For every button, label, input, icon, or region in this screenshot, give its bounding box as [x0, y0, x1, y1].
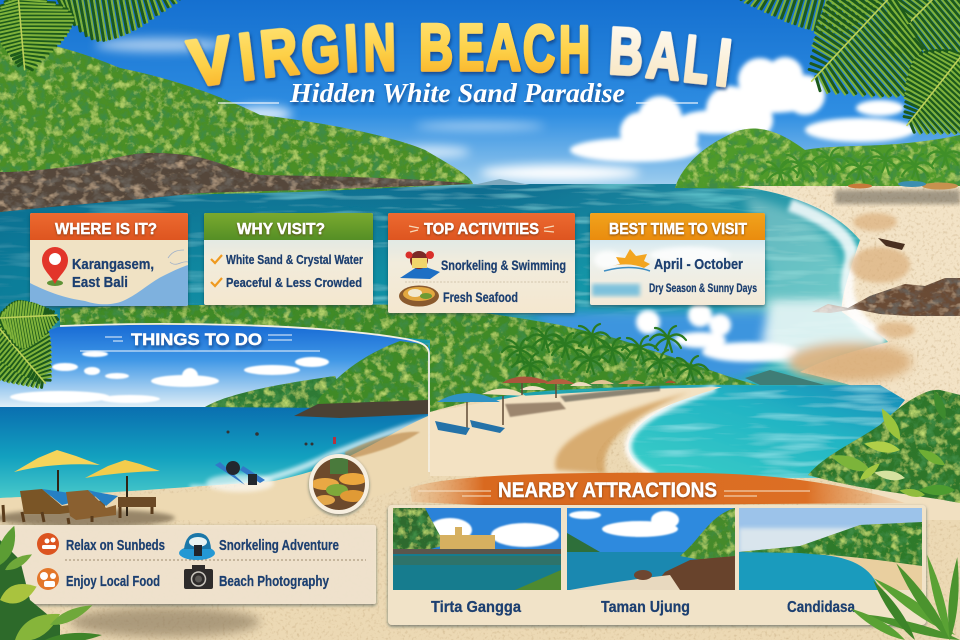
icon: sunbeds — [37, 533, 59, 555]
distant island — [473, 179, 530, 185]
boat — [878, 238, 905, 250]
plant: right bush — [808, 389, 960, 503]
mid foam and wet sand — [760, 300, 912, 382]
label: candidasa: Candidasa — [787, 599, 855, 616]
checks — [211, 255, 222, 286]
palm grove — [502, 324, 708, 382]
wet sand — [555, 392, 690, 474]
text: months: April - October — [654, 256, 743, 273]
icon: snorkeling — [179, 533, 215, 560]
icon: map pin — [42, 247, 68, 286]
panel: top activities — [388, 213, 575, 313]
panel: why visit — [204, 213, 373, 305]
photo: tirta gangga — [393, 508, 561, 590]
text: snorkeling adventure: Snorkeling Adventure — [219, 537, 339, 554]
inset hill — [317, 341, 428, 404]
text: snorkeling: Snorkeling & Swimming — [441, 257, 566, 273]
icon: local food — [37, 568, 59, 590]
title: virgin beach bali: N — [363, 10, 396, 84]
left hill rocks — [0, 153, 473, 212]
reasons: White Sand & Crystal Water — [226, 252, 363, 267]
header — [204, 213, 373, 240]
right hill — [675, 128, 960, 190]
mid clouds — [636, 303, 798, 362]
title: virgin beach bali: C — [523, 11, 555, 85]
title: virgin beach bali: A — [486, 10, 521, 84]
header — [30, 213, 188, 240]
icon: camera — [184, 565, 213, 589]
title: virgin beach bali: I — [343, 11, 360, 85]
icon: snorkeling — [400, 251, 440, 279]
text: enjoy local food: Enjoy Local Food — [66, 573, 160, 590]
inset: things to do scene — [0, 320, 430, 507]
inset sea — [0, 407, 430, 507]
lagoon foam — [628, 388, 715, 476]
foam shoreline — [790, 205, 885, 340]
cloud tint — [594, 247, 730, 269]
photo: taman ujung — [567, 508, 735, 590]
title: virgin beach bali: G — [299, 11, 342, 87]
label: tirta gangga: Tirta Gangga — [431, 599, 521, 616]
distant headland — [745, 370, 825, 385]
title: virgin beach bali: E — [458, 10, 484, 84]
left hill — [0, 41, 473, 212]
lounger one — [20, 489, 105, 514]
heading text: WHY VISIT? — [237, 221, 325, 238]
text: season: Dry Season & Sunny Days — [649, 281, 757, 295]
shadow — [0, 509, 175, 527]
lower sand — [0, 400, 960, 640]
inset foam — [190, 420, 430, 488]
label: taman ujung: Taman Ujung — [601, 599, 690, 616]
right rocks — [812, 278, 960, 316]
subtitle: Hidden White Sand Paradise — [289, 78, 625, 108]
inset rocks — [294, 400, 428, 418]
inset sand shore — [0, 416, 428, 520]
heading: NEARBY ATTRACTIONS — [498, 479, 717, 502]
title: virgin beach bali: H — [559, 12, 590, 86]
header — [388, 213, 575, 240]
central sand — [430, 387, 722, 476]
left umbrellas and loungers — [0, 450, 175, 527]
location text — [72, 256, 154, 291]
title: virgin beach bali — [184, 10, 735, 101]
inset wet sand — [345, 432, 420, 460]
clouds — [95, 38, 915, 181]
panel: attraction cards — [388, 505, 926, 625]
banner — [410, 473, 905, 506]
location text: East Bali — [72, 274, 128, 291]
palm: mid left — [0, 297, 75, 408]
title: virgin beach bali: I — [235, 19, 259, 94]
title: virgin beach bali: V — [184, 21, 237, 101]
umbrella poles — [58, 470, 127, 516]
mid sky patch — [525, 312, 770, 380]
heading: things to do — [80, 330, 320, 351]
panel: things to do list — [0, 525, 376, 604]
reasons: Peaceful & Less Crowded — [226, 275, 362, 290]
central beach umbrellas — [435, 376, 676, 435]
foam wash — [700, 195, 880, 375]
palm: top left — [0, 0, 180, 73]
header — [590, 213, 765, 240]
right hill palms — [762, 143, 960, 186]
lower right sand — [870, 395, 960, 520]
text: beach photography: Beach Photography — [219, 573, 330, 590]
icon: sun — [604, 249, 650, 271]
umbrella two — [85, 460, 160, 478]
far beach umbrellas — [835, 181, 960, 204]
panel: where is it — [30, 213, 188, 306]
swimmers — [226, 430, 336, 446]
inset distant hill — [205, 376, 350, 408]
title: virgin beach bali: L — [681, 21, 713, 97]
heading: things to do: THINGS TO DO — [131, 330, 262, 349]
location text: Karangasem, — [72, 256, 154, 273]
icon: food plate badge — [309, 454, 370, 515]
bottom shade — [70, 607, 260, 637]
map coast — [30, 265, 188, 306]
title: virgin beach bali: A — [644, 17, 684, 94]
palm: top right — [741, 0, 960, 168]
plant: bottom right — [849, 553, 960, 640]
inset clouds — [10, 351, 329, 403]
icon: seafood — [399, 286, 439, 306]
inset sky — [0, 320, 430, 408]
sea — [0, 184, 960, 404]
heading text: WHERE IS IT? — [55, 221, 157, 238]
title: virgin beach bali: R — [257, 13, 301, 91]
central lagoon — [628, 385, 905, 478]
side table — [118, 497, 156, 507]
central jungle — [60, 304, 757, 412]
banner rules — [418, 491, 810, 496]
heading text: BEST TIME TO VISIT — [609, 221, 747, 238]
umbrella one — [14, 450, 100, 472]
heading text: TOP ACTIVITIES — [424, 221, 539, 238]
reasons — [226, 252, 363, 290]
plant: bottom left — [0, 524, 102, 640]
panel: best time to visit — [590, 213, 765, 305]
nearby attractions section — [388, 473, 926, 625]
photo: candidasa — [739, 508, 922, 590]
lounger two — [66, 490, 116, 520]
title: virgin beach bali: B — [607, 13, 645, 89]
jet ski — [206, 461, 274, 492]
wet sand patches — [850, 213, 915, 338]
sky — [0, 0, 960, 190]
text: seafood: Fresh Seafood — [443, 289, 518, 305]
right beach sand — [735, 186, 960, 430]
text: relax on sunbeds: Relax on Sunbeds — [66, 537, 165, 554]
title: virgin beach bali: I — [712, 25, 735, 100]
inset white frame — [60, 324, 429, 472]
title: virgin beach bali: B — [419, 10, 453, 84]
